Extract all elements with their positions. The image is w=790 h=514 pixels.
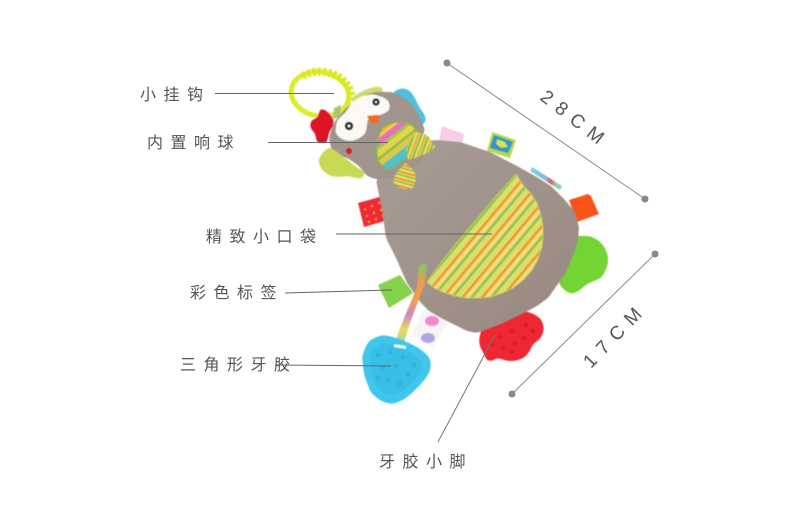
label: built-in rattle: 内置响球 [147,134,241,152]
label: small hook: 小挂钩 [140,86,211,104]
icon: green foot [558,236,608,294]
label: colorful tags [190,284,392,302]
ribbon to teether [393,264,427,348]
dimension: 17 cm: 17CM [579,298,652,372]
tag: red dotted [358,196,388,227]
pocket [427,174,543,298]
tag: pink [438,126,464,146]
icon: green clip [333,105,341,119]
icon: owl face [335,94,390,154]
label: pocket: 精致小口袋 [206,228,324,246]
tag: small colored [530,167,562,190]
body [376,140,579,333]
tag: blue and green [487,132,516,158]
icon: green head tuft [351,86,384,104]
icon: green wing [318,147,366,179]
icon: striped bow [393,132,435,189]
label: colorful tags: 彩色标签 [190,284,284,302]
icon: yellow teether ring [288,67,352,121]
bib stripes [375,120,418,170]
icon: red foot [479,311,544,361]
tag: green ribbon [378,275,413,308]
label: teething feet: 牙胶小脚 [379,453,473,471]
owl head [328,91,425,180]
tag: orange [569,194,599,222]
icon: blue ear [389,88,426,125]
label: teething feet [379,335,495,471]
icon: red flower [310,108,334,143]
tag: butterfly [412,308,448,347]
dimension: 17 cm [508,250,658,398]
dimension: 28 cm [444,60,648,202]
plush toy illustration [288,67,608,404]
icon: blue triangle teether [362,335,431,404]
dimension: 28 cm: 28CM [536,86,614,154]
label: triangle teether: 三角形牙胶 [180,356,298,374]
